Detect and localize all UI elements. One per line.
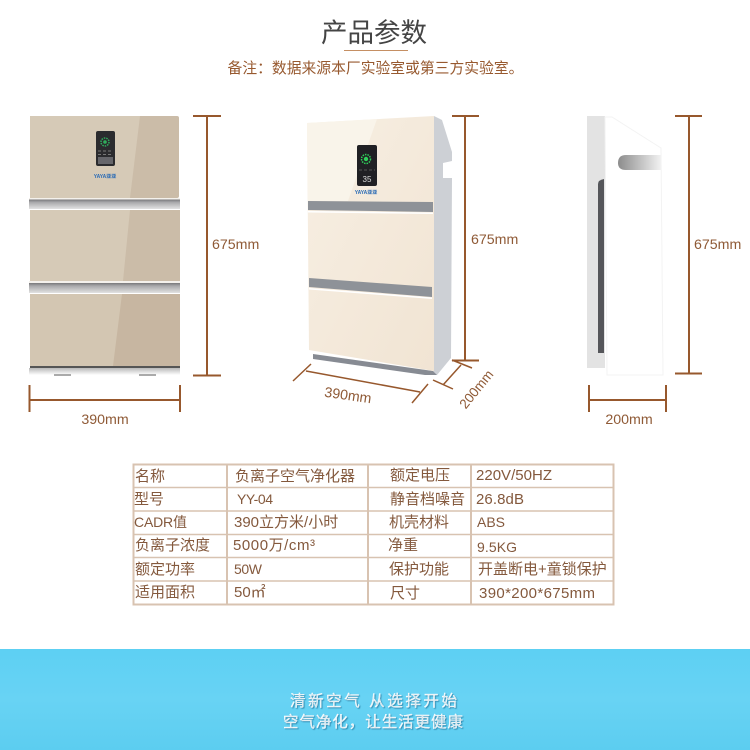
table column 3: labels bbox=[388, 467, 465, 602]
table column 4: values bbox=[476, 467, 607, 602]
table column 3: labels: 机壳材料 bbox=[389, 514, 449, 531]
table column 1: labels: 负离子浓度 bbox=[135, 537, 210, 554]
brand logo: YAYA亚亚 bbox=[94, 174, 116, 180]
dimension: front width bbox=[29, 385, 180, 412]
table column 2: values: 50W bbox=[234, 561, 263, 577]
brand logo: YAYA亚亚 bbox=[355, 190, 377, 196]
label: front width: 390mm bbox=[81, 412, 129, 428]
dimension: angled depth bbox=[433, 360, 472, 389]
table column 4: values: ABS bbox=[477, 514, 505, 530]
table column 4: values: 390*200*675mm bbox=[479, 585, 595, 602]
label: front height: 675mm bbox=[212, 237, 259, 253]
table column 3: labels: 额定电压 bbox=[390, 467, 450, 484]
subtitle note: 备注：数据来源本厂实验室或第三方实验室。 bbox=[228, 59, 523, 77]
banner text line 1: 清新空气 从选择开始 bbox=[290, 692, 457, 710]
banner text line 2: 空气净化，让生活更健康 bbox=[283, 713, 463, 731]
label: side height: 675mm bbox=[694, 237, 741, 253]
table column 1: labels: 额定功率 bbox=[135, 561, 195, 578]
table column 1: labels: CADR值 bbox=[134, 514, 187, 530]
product: front view bbox=[29, 116, 180, 376]
handle recess bbox=[618, 155, 661, 170]
table column 4: values: 26.8dB bbox=[476, 491, 524, 508]
control panel bbox=[96, 131, 115, 166]
table column 4: values: 开盖断电+童锁保护 bbox=[478, 560, 607, 578]
specification table bbox=[133, 464, 614, 605]
label: angled width: 390mm bbox=[323, 385, 372, 407]
banner bbox=[0, 649, 750, 750]
product: angled view bbox=[307, 116, 452, 375]
dimension: side width bbox=[589, 385, 666, 412]
table column 1: labels: 型号 bbox=[134, 491, 164, 508]
dimension: angled height bbox=[452, 116, 479, 361]
table column 1: labels: 名称 bbox=[135, 468, 165, 485]
table column 3: labels: 净重 bbox=[388, 537, 418, 554]
dimension: front height bbox=[193, 116, 221, 376]
table column 2: values bbox=[233, 468, 355, 601]
product: side view bbox=[587, 116, 663, 375]
table column 1: labels: 适用面积 bbox=[135, 584, 195, 601]
control panel: 35 bbox=[363, 175, 372, 184]
table column 4: values: 9.5KG bbox=[477, 539, 517, 555]
table column 2: values: 5000万/cm³ bbox=[233, 537, 315, 554]
table column 3: labels: 尺寸 bbox=[390, 585, 420, 602]
table column 4: values: 220V/50HZ bbox=[476, 467, 552, 484]
dimension: side height bbox=[675, 116, 702, 374]
label: angled depth: 200mm bbox=[456, 367, 496, 412]
control panel bbox=[357, 145, 377, 186]
dimension: angled width bbox=[293, 364, 428, 403]
title: 产品参数 bbox=[321, 18, 427, 48]
label: side width: 200mm bbox=[605, 412, 653, 428]
table column 1: labels bbox=[134, 468, 210, 601]
label: angled height: 675mm bbox=[471, 232, 518, 248]
table column 2: values: 50㎡ bbox=[234, 584, 266, 601]
table column 2: values: 390立方米/小时 bbox=[234, 514, 338, 531]
table column 2: values: 负离子空气净化器 bbox=[235, 468, 355, 485]
table column 2: values: YY-04 bbox=[237, 491, 273, 507]
table column 3: labels: 保护功能 bbox=[389, 561, 449, 578]
table column 3: labels: 静音档噪音 bbox=[390, 491, 465, 508]
